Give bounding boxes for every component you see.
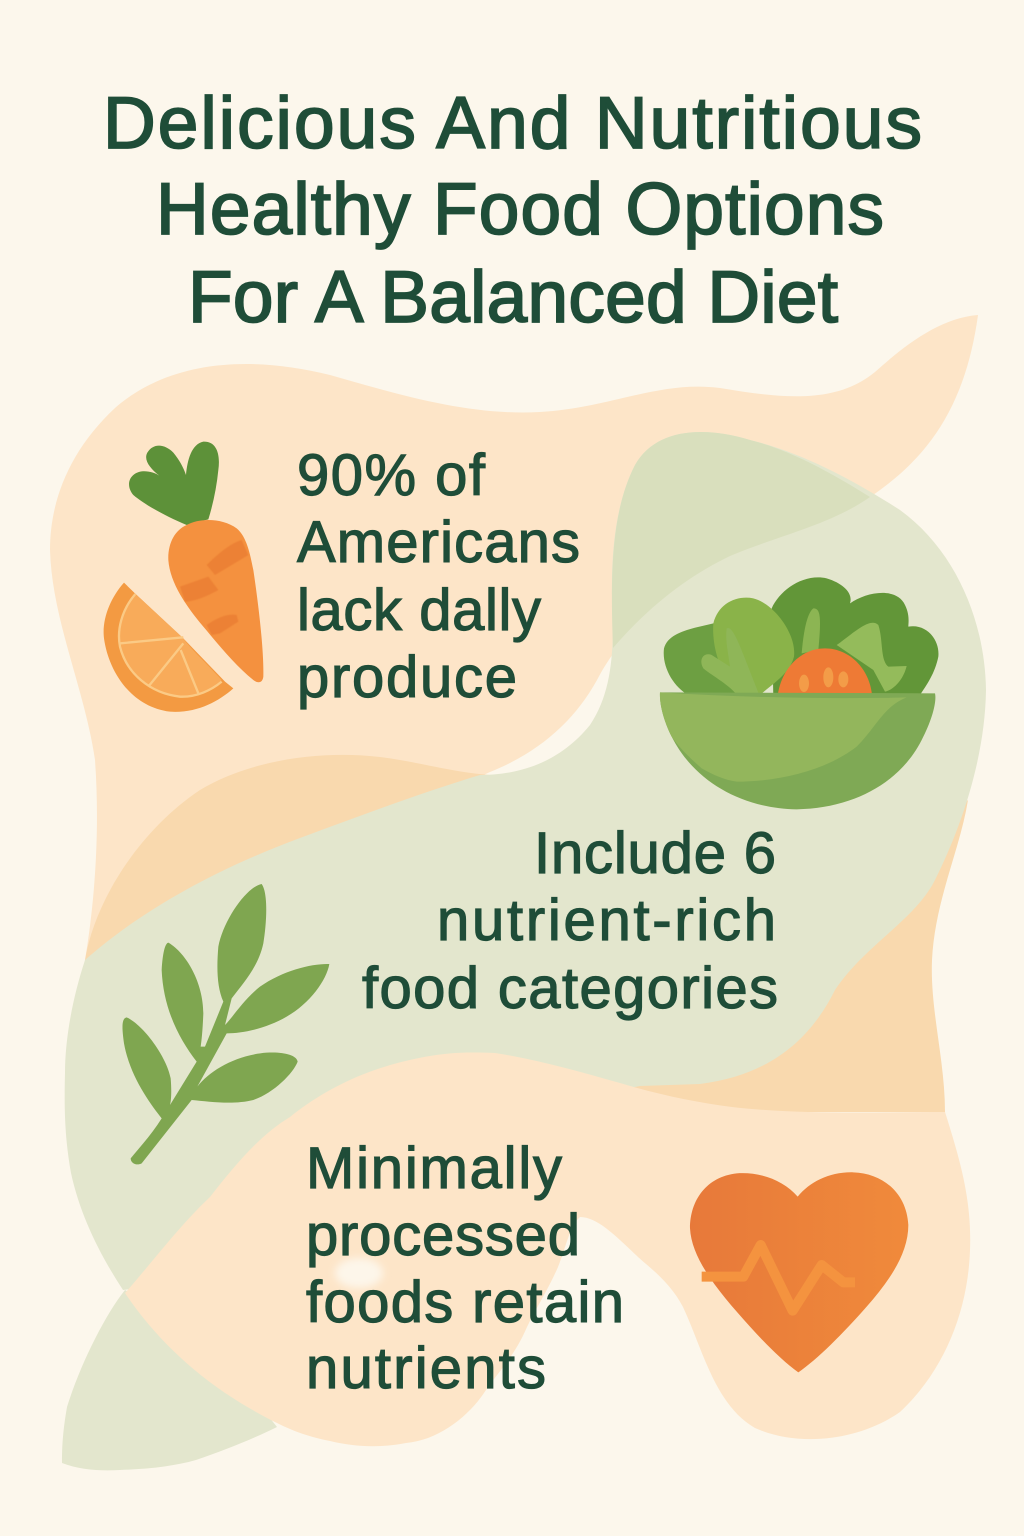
text: produce statistic: 90% of [297, 443, 486, 508]
text: food categories: nutrient-rich [437, 888, 776, 953]
title: Healthy Food Options [156, 169, 884, 250]
text: food categories: Include 6 [534, 821, 776, 886]
title: For A Balanced Diet [188, 257, 838, 338]
text: produce statistic: produce [297, 645, 517, 710]
text: minimally processed foods: nutrients [306, 1336, 546, 1401]
text: produce statistic: Americans [297, 510, 580, 575]
text: minimally processed foods: processed [306, 1203, 580, 1268]
text: minimally processed foods [306, 1136, 624, 1401]
icon: heart with pulse [690, 1172, 908, 1372]
text: food categories [362, 821, 778, 1021]
icon: salad bowl [660, 577, 938, 809]
text: minimally processed foods: foods retain [306, 1270, 624, 1335]
text: produce statistic [297, 443, 580, 710]
title: Delicious And Nutritious [103, 83, 922, 164]
text: produce statistic: lack dally [297, 578, 541, 643]
text: food categories: food categories [362, 956, 778, 1021]
title [103, 83, 922, 338]
icon: leafy sprig [122, 884, 329, 1164]
background blobs [50, 315, 986, 1470]
icon: orange slice [104, 583, 233, 712]
text: minimally processed foods: Minimally [306, 1136, 562, 1201]
icon: carrot [129, 442, 263, 682]
